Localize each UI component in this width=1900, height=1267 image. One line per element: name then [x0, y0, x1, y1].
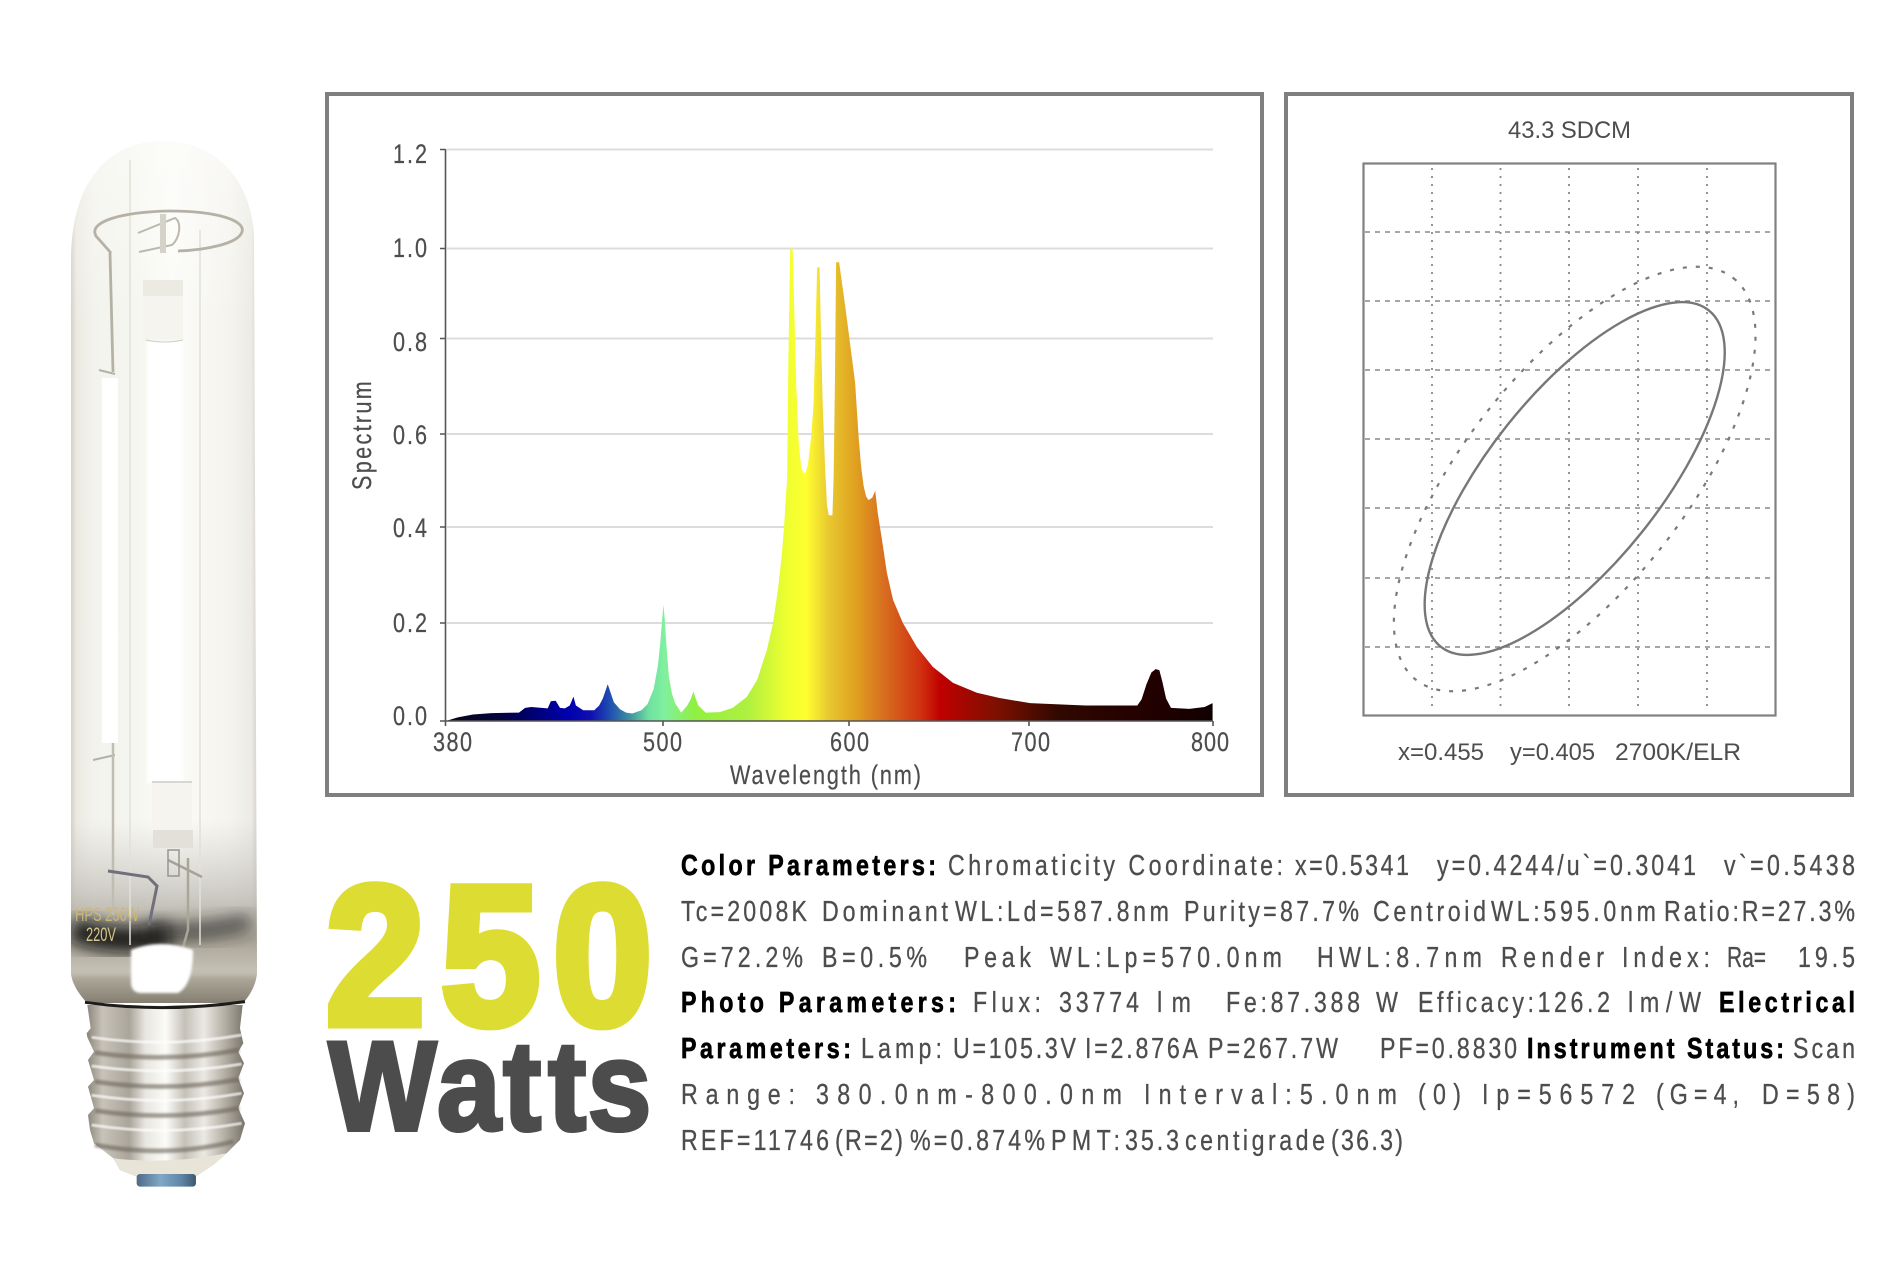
text block: measurement parameters: centigrade [1185, 1123, 1325, 1157]
text block: measurement parameters: Dominant [822, 894, 949, 928]
return rod [102, 378, 118, 743]
horizontal grid lines [447, 150, 1213, 623]
panel: SDCM chromaticity chart [1286, 94, 1852, 795]
chromaticity readout: y=0.405 [1510, 739, 1595, 766]
arc tube [143, 280, 193, 848]
axes [440, 149, 1213, 726]
text block: measurement parameters: WL:595.0nm [1491, 894, 1656, 928]
text block: measurement parameters: Electrical [1719, 985, 1855, 1019]
inner glass stem [131, 944, 193, 993]
ellipse plot frame and grid [1364, 164, 1776, 716]
text block: measurement parameters: P=267.7W [1208, 1031, 1338, 1065]
heading: Watts: Watts [329, 1015, 651, 1157]
x-axis tick labels: 500 [643, 728, 682, 758]
text block: measurement parameters: Render [1501, 940, 1604, 974]
text block: measurement parameters: v`=0.5438 [1724, 848, 1855, 882]
text block: measurement parameters: (R=2) [835, 1123, 903, 1157]
printed lamp rating [75, 905, 139, 946]
text block: measurement parameters: Tc=2008K [681, 894, 807, 928]
text block: measurement parameters: 380.0nm-800.0nm [816, 1077, 1122, 1111]
y-axis tick labels: 1.2 [393, 140, 427, 170]
text block: measurement parameters: U=105.3V [953, 1031, 1076, 1065]
text block: measurement parameters: Index: [1622, 940, 1710, 974]
printed lamp rating: 220V [86, 925, 116, 946]
y-axis tick labels: 0.2 [393, 609, 427, 639]
y-axis tick labels: 0.0 [393, 702, 427, 732]
spectrum area [446, 249, 1213, 721]
inner solid ellipse [1373, 257, 1776, 700]
glass envelope [71, 143, 257, 1003]
text block: measurement parameters: WL:Lp=570.0nm [1050, 940, 1282, 974]
text block: measurement parameters: 19.5 [1798, 940, 1855, 974]
text block: measurement parameters: Fe:87.388 [1226, 985, 1360, 1019]
x-axis tick labels: 800 [1191, 728, 1229, 758]
y-axis tick labels: 1.0 [393, 234, 427, 264]
x-axis tick labels: 380 [433, 728, 472, 758]
panel: spectrum chart [327, 94, 1262, 795]
text block: measurement parameters: Chromaticity Coordinate: [948, 848, 1283, 882]
text block: measurement parameters: Ip=56572 [1482, 1077, 1635, 1111]
lamp photo illustration [71, 143, 257, 1187]
outer dotted ellipse [1329, 210, 1820, 748]
y-axis tick labels [393, 140, 427, 732]
text block: measurement parameters: I=2.876A [1085, 1031, 1198, 1065]
text block: measurement parameters: Scan [1793, 1031, 1855, 1065]
text block: measurement parameters: PMT: [1051, 1123, 1120, 1157]
text block: measurement parameters: PF=0.8830 [1380, 1031, 1517, 1065]
y-axis tick labels: 0.8 [393, 328, 427, 358]
text block: measurement parameters: Purity=87.7% [1184, 894, 1359, 928]
text block: measurement parameters: lm [1157, 985, 1191, 1019]
text block: measurement parameters: Interval:5.0nm [1144, 1077, 1397, 1111]
text block: measurement parameters: (0) [1418, 1077, 1461, 1111]
text block: measurement parameters: x=0.5341 [1295, 848, 1409, 882]
x-axis tick labels [433, 728, 1229, 758]
text block: measurement parameters: 35.3 [1125, 1123, 1179, 1157]
text block: measurement parameters: REF=11746 [681, 1123, 829, 1157]
text block: measurement parameters: y=0.4244/u`=0.3041 [1437, 848, 1696, 882]
text block: measurement parameters: lm/W [1628, 985, 1701, 1019]
y-axis tick labels: 0.6 [393, 421, 427, 451]
text block: measurement parameters: (G=4, [1656, 1077, 1739, 1111]
chromaticity readout [1398, 739, 1741, 766]
heading: wattage number: 250 [326, 844, 652, 1066]
text block: measurement parameters: G=72.2% [681, 940, 803, 974]
x-axis tick labels: 600 [830, 728, 869, 758]
lower lead wires [108, 850, 202, 958]
screw base [85, 1002, 245, 1187]
text block: measurement parameters: Peak [964, 940, 1032, 974]
support frame wire [93, 211, 242, 915]
printed lamp rating: HPS 250W [75, 905, 139, 926]
text block: measurement parameters: 33774 [1059, 985, 1139, 1019]
text block: measurement parameters: Lamp: [861, 1031, 942, 1065]
text block: measurement parameters: Centroid [1373, 894, 1486, 928]
x-axis title: Wavelength (nm) [730, 761, 921, 791]
text block: measurement parameters: %=0.874% [910, 1123, 1045, 1157]
text block: measurement parameters: B=0.5% [822, 940, 927, 974]
text block: measurement parameters: D=58) [1762, 1077, 1855, 1111]
chromaticity readout: 2700K/ELR [1615, 739, 1741, 766]
text block: measurement parameters: WL:Ld=587.8nm [955, 894, 1169, 928]
text block: measurement parameters: Photo Parameters: [681, 985, 956, 1019]
text block: measurement parameters: Ratio:R=27.3% [1664, 894, 1855, 928]
y-axis title: Spectrum [348, 381, 378, 490]
text block: measurement parameters: HWL:8.7nm [1317, 940, 1482, 974]
chromaticity readout: x=0.455 [1398, 739, 1484, 766]
text block: measurement parameters: Ra= [1727, 940, 1766, 974]
y-axis tick labels: 0.4 [393, 514, 427, 544]
text block: measurement parameters: (36.3) [1331, 1123, 1403, 1157]
text block: measurement parameters: W [1376, 985, 1398, 1019]
text block: measurement parameters: Parameters: [681, 1031, 851, 1065]
SDCM title: 43.3 SDCM [1508, 117, 1631, 144]
text block: measurement parameters: Color Parameters: [681, 848, 936, 882]
text block: measurement parameters: Flux: [973, 985, 1041, 1019]
text block: measurement parameters: Range: [681, 1077, 795, 1111]
text block: measurement parameters: Efficacy:126.2 [1418, 985, 1610, 1019]
text block: measurement parameters [681, 848, 1855, 1157]
x-axis tick labels: 700 [1011, 728, 1050, 758]
text block: measurement parameters: Instrument Status: [1527, 1031, 1784, 1065]
